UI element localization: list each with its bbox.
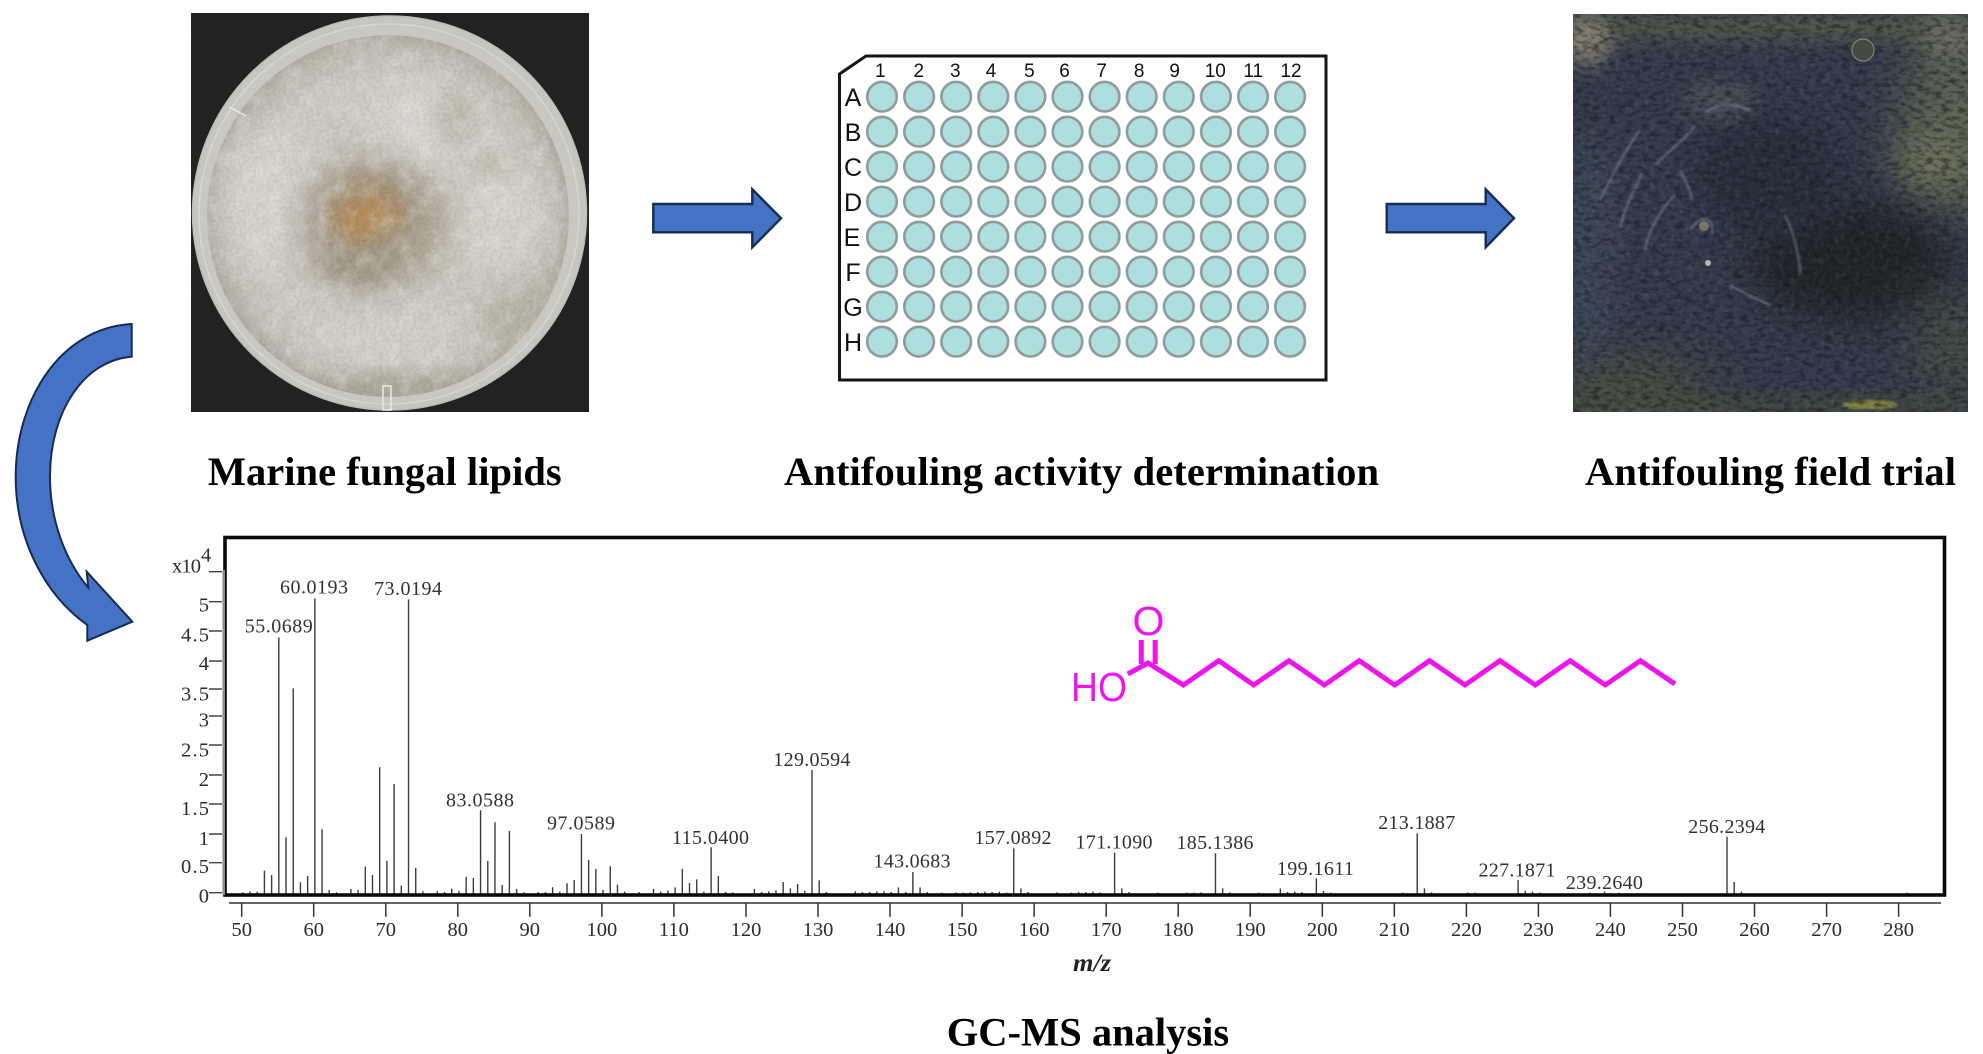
y axis: 1 <box>199 828 209 850</box>
column numbers: 10 <box>1205 61 1226 82</box>
column numbers: 12 <box>1280 61 1302 82</box>
peak labels: 171.1090 <box>1076 831 1152 853</box>
x axis: 220 <box>1451 919 1482 941</box>
column numbers: 2 <box>914 61 924 82</box>
row letters: G <box>843 294 863 322</box>
x axis: 210 <box>1379 919 1410 941</box>
curved arrow: culture to GC-MS <box>16 324 132 641</box>
column numbers: 11 <box>1243 61 1263 82</box>
row letters: H <box>844 329 862 357</box>
row letters: B <box>845 119 861 147</box>
peak labels: 60.0193 <box>280 576 348 598</box>
column numbers: 1 <box>875 61 886 82</box>
96-well plate <box>840 56 1326 380</box>
peak labels: 143.0683 <box>874 850 950 872</box>
x axis: 260 <box>1739 919 1770 941</box>
x axis: 150 <box>947 919 977 941</box>
peak labels: 239.2640 <box>1566 872 1643 894</box>
y axis: 0 <box>199 886 209 908</box>
peak labels: 129.0594 <box>773 749 850 771</box>
x axis: 160 <box>1019 919 1049 941</box>
x axis: 230 <box>1523 919 1554 941</box>
column numbers: 6 <box>1059 61 1070 82</box>
heading: Marine fungal lipids: Marine fungal lipids <box>208 449 562 494</box>
y axis: x10 <box>172 556 201 578</box>
row letters: D <box>844 189 862 217</box>
y axis: 5 <box>199 595 209 617</box>
arrow: plate to field trial <box>1387 189 1514 247</box>
peak labels: 199.1611 <box>1277 858 1354 880</box>
row letters: F <box>845 259 861 287</box>
peak labels: 227.1871 <box>1478 860 1556 882</box>
column numbers <box>875 61 1302 82</box>
spectrum peaks <box>243 598 1907 895</box>
peak labels: 213.1887 <box>1378 812 1455 834</box>
row letters <box>843 84 863 357</box>
x axis: 240 <box>1595 919 1626 941</box>
x axis: 180 <box>1163 919 1194 941</box>
column numbers: 7 <box>1096 61 1107 82</box>
x axis: 200 <box>1307 919 1338 941</box>
chart frame <box>225 538 1944 895</box>
x axis: 50 <box>231 919 252 941</box>
y axis: 2 <box>199 769 209 791</box>
y axis: 4 <box>199 653 209 675</box>
row letters: C <box>844 154 862 182</box>
x axis: 80 <box>448 919 468 941</box>
peak labels: 185.1386 <box>1176 832 1254 854</box>
column numbers: 3 <box>950 61 961 82</box>
x axis: 270 <box>1811 919 1842 941</box>
x axis: m/z <box>1073 950 1111 977</box>
column numbers: 5 <box>1024 61 1035 82</box>
x axis: 120 <box>731 919 761 941</box>
peak labels: 73.0194 <box>374 578 442 600</box>
y axis: 2.5 <box>181 740 209 762</box>
column numbers: 8 <box>1134 61 1144 82</box>
peak labels: 115.0400 <box>672 827 749 849</box>
row letters: A <box>845 84 862 112</box>
x axis: 60 <box>303 919 324 941</box>
y axis: 0.5 <box>181 856 209 878</box>
y axis: 4.5 <box>181 625 209 647</box>
heading: Antifouling field trial: Antifouling field trial <box>1585 449 1956 494</box>
peak labels: 256.2394 <box>1688 816 1765 838</box>
photo: antifouling field trial panel <box>1573 14 1968 412</box>
x axis: 250 <box>1667 919 1698 941</box>
column numbers: 4 <box>986 61 997 82</box>
peak labels: 83.0588 <box>446 790 514 812</box>
x axis: 90 <box>520 919 540 941</box>
row letters: E <box>844 224 860 252</box>
photo: marine fungus culture in petri dish <box>191 13 589 412</box>
arrow: culture to plate <box>653 189 781 247</box>
chemical structure: palmitic acid: HO <box>1071 664 1127 710</box>
chemical structure: palmitic acid <box>1071 598 1675 710</box>
y axis: 1.5 <box>181 798 209 820</box>
peak labels: 55.0689 <box>245 616 313 638</box>
chemical structure: palmitic acid: O <box>1133 598 1164 644</box>
x axis: 190 <box>1235 919 1266 941</box>
peak labels: 157.0892 <box>974 827 1052 849</box>
y axis: 3.5 <box>181 684 209 706</box>
y axis <box>172 545 225 908</box>
x axis: 110 <box>659 919 689 941</box>
peak labels: 97.0589 <box>547 812 615 834</box>
x axis: 70 <box>376 919 396 941</box>
heading: GC-MS analysis: GC-MS analysis <box>947 1010 1229 1054</box>
column numbers: 9 <box>1169 61 1180 82</box>
y axis: 3 <box>199 710 209 732</box>
x axis: 130 <box>803 919 833 941</box>
y axis: 4 <box>201 545 211 567</box>
x axis: 100 <box>587 919 617 941</box>
heading: Antifouling activity determination: Antifouling activity determination <box>784 449 1379 494</box>
mass spectrum chart <box>172 538 1944 977</box>
peak labels <box>245 576 1765 894</box>
x axis <box>229 903 1941 977</box>
x axis: 280 <box>1883 919 1914 941</box>
x axis: 140 <box>875 919 905 941</box>
x axis: 170 <box>1091 919 1122 941</box>
